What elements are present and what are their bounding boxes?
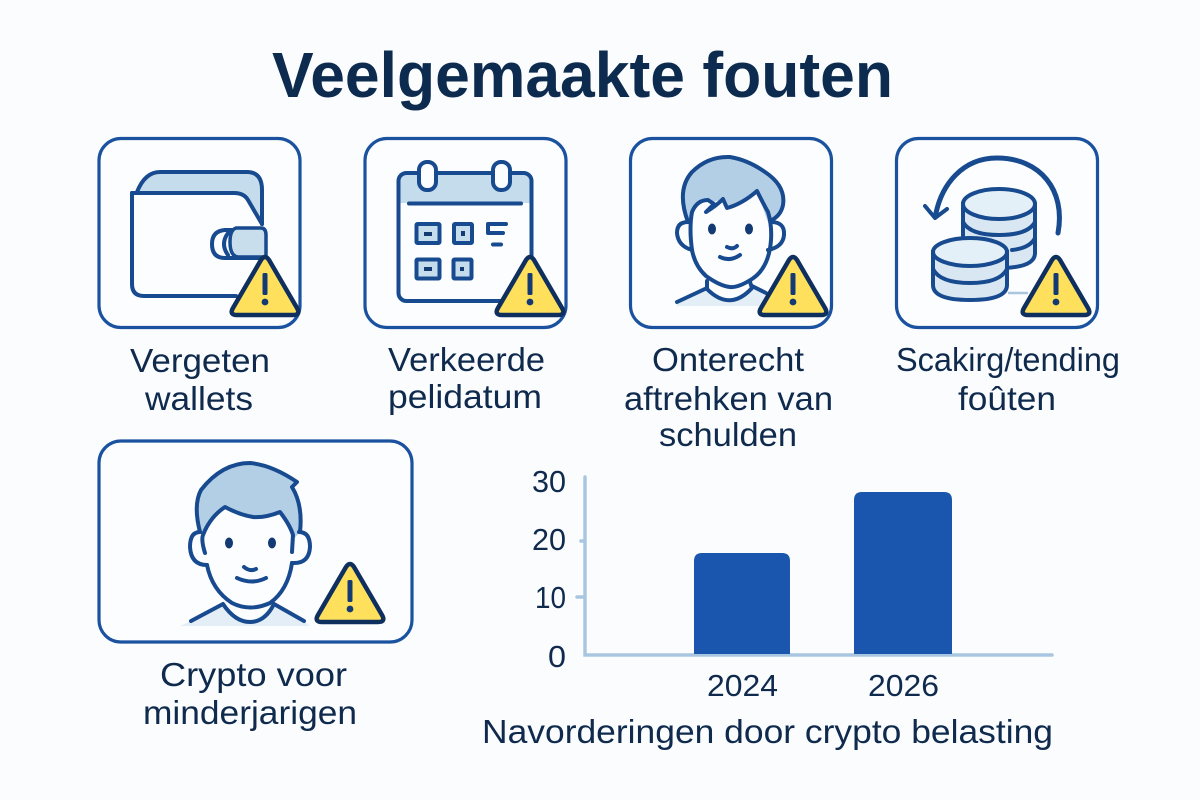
label: staking/lending fouten: Scakirg/tending	[896, 341, 1120, 378]
label: staking/lending fouten: foûten	[958, 380, 1056, 417]
label: onterecht aftrekken van schulden: schulden	[659, 416, 797, 453]
y axis labels: 0	[548, 639, 566, 674]
panel: vergeten wallets	[99, 138, 300, 328]
y axis labels	[532, 464, 566, 674]
label: onterecht aftrekken van schulden: aftrehken van	[624, 380, 833, 417]
label: crypto voor minderjarigen: minderjarigen	[143, 694, 357, 731]
y axis labels: 10	[535, 580, 566, 615]
icon: person	[677, 157, 784, 306]
bar 2026	[854, 492, 952, 654]
icon: warning triangle	[317, 564, 383, 622]
label: crypto voor minderjarigen: Crypto voor	[160, 656, 347, 693]
title: Veelgemaakte fouten	[272, 39, 893, 111]
x axis labels	[707, 668, 939, 703]
bar 2024	[694, 553, 790, 654]
y axis labels: 30	[532, 464, 566, 499]
panel: onterecht aftrekken van schulden	[630, 138, 832, 328]
icon: warning triangle	[232, 257, 298, 315]
bar chart: navorderingen	[482, 464, 1053, 750]
x axis labels: 2026	[868, 668, 939, 703]
label: staking/lending fouten	[896, 341, 1120, 417]
icon: calendar	[398, 162, 532, 301]
label: crypto voor minderjarigen	[143, 656, 357, 731]
label: onterecht aftrekken van schulden: Onterecht	[652, 341, 804, 378]
panel: crypto voor minderjarigen	[99, 441, 412, 642]
y axis labels: 20	[532, 522, 566, 557]
label: verkeerde peildatum	[388, 341, 545, 415]
icon: warning triangle	[497, 257, 563, 315]
icon: wallet	[132, 172, 266, 296]
icon: warning triangle	[1023, 257, 1089, 315]
x axis labels: 2024	[707, 668, 778, 703]
label: vergeten wallets: wallets	[144, 380, 253, 417]
icon: person	[180, 463, 310, 626]
icon: coin stacks with arrow	[925, 158, 1059, 300]
label: vergeten wallets: Vergeten	[130, 342, 270, 379]
chart caption: Navorderingen door crypto belasting	[482, 713, 1053, 750]
label: vergeten wallets	[130, 342, 270, 417]
panel: verkeerde peildatum	[365, 138, 566, 328]
label: onterecht aftrekken van schulden	[624, 341, 833, 453]
panel: staking/lending fouten	[896, 138, 1098, 328]
icon: warning triangle	[760, 257, 826, 315]
label: verkeerde peildatum: pelidatum	[388, 378, 542, 415]
label: verkeerde peildatum: Verkeerde	[388, 341, 545, 378]
